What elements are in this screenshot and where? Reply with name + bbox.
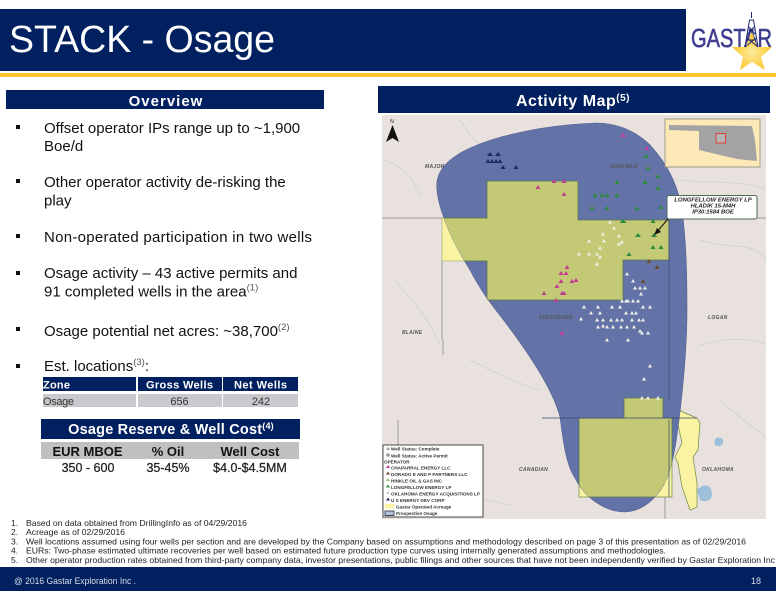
legend: Gastar Operated Acreage: [396, 504, 452, 510]
table: Osage reserve and well cost: Well Cost: [220, 444, 280, 459]
overview bullet list: 91 completed wells in the area: [44, 284, 247, 300]
panel: activity map heading: Activity Map: [516, 93, 616, 110]
icon: north arrow: N: [390, 119, 394, 125]
legend: [383, 445, 483, 517]
footer bar: [0, 567, 776, 591]
overview bullet list: play: [44, 192, 72, 210]
table: gross and net wells: 656: [170, 396, 189, 408]
legend: Well Status: Active Permit: [391, 454, 448, 458]
focus area polygon: [437, 123, 687, 512]
overview bullet list: :: [145, 358, 149, 375]
table: gross and net wells: Net Wells: [234, 380, 287, 392]
footnotes: Well locations assumed using four wells per section and are developed by the Company based on assumptions and methodology described on page 3 of this presentation as of 02/29/2016: [26, 536, 746, 546]
acreage inside focus area: [442, 181, 672, 497]
footnotes: 5.: [11, 555, 18, 565]
title banner: STACK - Osage: [9, 19, 275, 61]
legend: LONGFELLOW ENERGY LP: [391, 485, 451, 490]
panel: overview heading: [6, 90, 324, 110]
footnotes: Other operator production rates obtained from third-party company data, investor presentations, public filings and other sources that have not been independently verified by Gastar Exploration Inc: [26, 555, 776, 565]
footnotes: Acreage as of 02/29/2016: [26, 527, 125, 537]
wells: Dorado: [640, 259, 660, 283]
table: gross and net wells: [43, 377, 298, 408]
table: gross and net wells: Gross Wells: [146, 380, 213, 392]
county labels: MAJOR: [425, 164, 445, 170]
wells: Longfellow and Hinkle: [590, 154, 664, 256]
icon: north arrow: [386, 119, 399, 142]
overview bullet list: Osage potential net acres: ~38,700: [44, 323, 278, 340]
overview bullet list: Non-operated participation in two wells: [44, 229, 312, 246]
overview bullet list: Osage activity – 43 active permits and: [44, 265, 297, 282]
table: gross and net wells: Osage: [43, 396, 74, 408]
overview bullet list: (1): [247, 282, 258, 294]
county labels: LOGAN: [708, 315, 728, 321]
county labels: KINGFISHER: [539, 315, 573, 321]
footnotes: Based on data obtained from DrillingInfo as of 04/29/2016: [26, 518, 247, 528]
panel: overview heading: Overview: [129, 93, 203, 110]
footnotes: 2.: [11, 527, 18, 537]
table: Osage reserve and well cost: Osage Reserve & Well Cost: [68, 422, 262, 438]
icon: Gastar logo: [691, 12, 772, 70]
legend: U S ENERGY DEV CORP: [391, 498, 445, 503]
county labels: [402, 164, 734, 473]
table: gross and net wells: Zone: [43, 380, 70, 392]
wells: Chaparral Energy: [536, 133, 650, 335]
footnotes: 1.: [11, 518, 18, 528]
legend: OPERATOR: [384, 460, 410, 464]
footnotes: 4.: [11, 546, 18, 556]
wells: U and S Energy: [486, 152, 518, 169]
table: Osage reserve and well cost: % Oil: [152, 444, 184, 459]
overview bullet list: (3): [133, 357, 145, 368]
table: Osage reserve and well cost: 350 - 600: [62, 461, 114, 475]
panel: activity map heading: (5): [616, 93, 630, 104]
panel: activity map heading: [378, 86, 770, 113]
footnotes: 3.: [11, 536, 18, 546]
callout: Longfellow Energy well: [654, 196, 757, 235]
table: Osage reserve and well cost: [41, 419, 300, 475]
callout: Longfellow Energy well: LONGFELLOW ENERGY LP: [674, 198, 752, 204]
overview bullet list: Other operator activity de-risking the: [44, 174, 286, 191]
county labels: GARFIELD: [610, 164, 638, 170]
gold divider: [0, 73, 776, 77]
title banner: [0, 9, 686, 71]
footer bar: 18: [751, 576, 761, 586]
table: Osage reserve and well cost: 35-45%: [146, 461, 190, 475]
footer bar: @ 2016 Gastar Exploration Inc .: [14, 576, 136, 586]
table: Osage reserve and well cost: (4): [262, 421, 274, 431]
county labels: CANADIAN: [519, 467, 548, 473]
legend: OKLAHOMA ENERGY ACQUISITIONS LP: [391, 492, 480, 496]
table: Osage reserve and well cost: EUR MBOE: [52, 444, 123, 459]
wells: Oklahoma Energy Acquisitions: [577, 220, 660, 400]
legend: HINKLE OIL & GAS INC: [391, 478, 443, 484]
overview bullet list: Est. locations: [44, 358, 133, 375]
table: gross and net wells: 242: [252, 396, 270, 408]
overview bullet list: [16, 120, 312, 375]
overview bullet list: (2): [278, 322, 290, 333]
inset: Oklahoma locator map: [665, 119, 760, 167]
callout: Longfellow Energy well: IP30:1584 BOE: [692, 210, 735, 216]
county labels: BLAINE: [402, 330, 423, 336]
county labels: OKLAHOMA: [702, 467, 734, 473]
legend: CHAPARRAL ENERGY LLC: [391, 466, 451, 470]
legend: DORADO E AND P PARTNERS LLC: [391, 472, 468, 477]
footnotes: [11, 518, 776, 565]
footnotes: EURs: Two-phase estimated ultimate recoveries per well based on estimated future production type curves using internally generated assumptions and methodologies.: [26, 546, 666, 556]
acreage outside focus area: [442, 218, 488, 300]
legend: Prospective Osage: [396, 511, 438, 516]
table: Osage reserve and well cost: $4.0-$4.5MM: [213, 461, 287, 475]
overview bullet list: Offset operator IPs range up to ~1,900: [44, 120, 300, 137]
legend: Well Status: Complete: [391, 446, 440, 452]
map: activity map: [382, 115, 770, 520]
overview bullet list: Boe/d: [44, 138, 83, 155]
callout: Longfellow Energy well: HLADIK 15-M4H: [691, 204, 736, 210]
lake: [697, 437, 723, 501]
